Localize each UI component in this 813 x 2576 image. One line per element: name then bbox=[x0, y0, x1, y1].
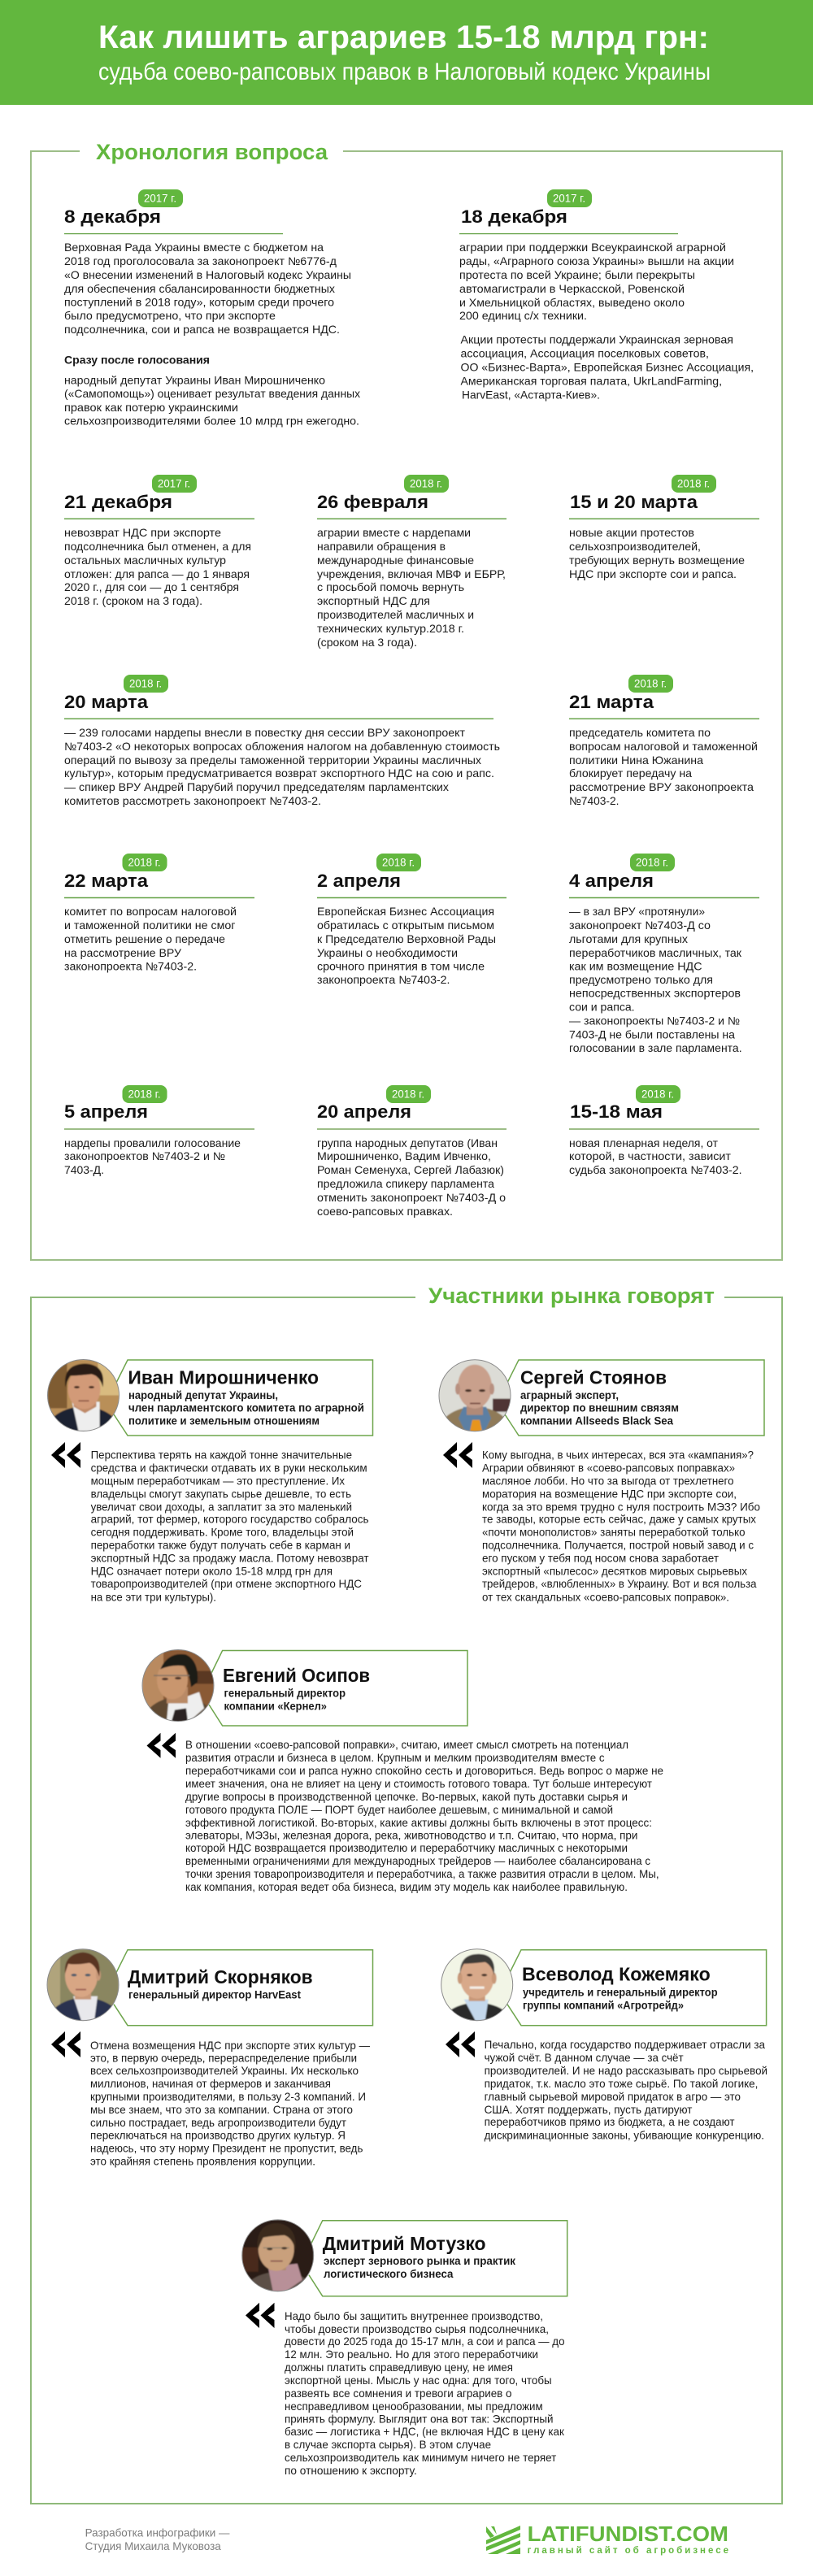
year badge: 2018 г. bbox=[128, 1088, 161, 1101]
event: 15 и 20 марта bbox=[569, 475, 759, 580]
body text bbox=[64, 527, 251, 607]
quote text: экспортной цены. Мысль у нас одна: для того, чтобы bbox=[285, 2374, 552, 2387]
body text: Американская торговая палата, UkrLandFarming, bbox=[460, 376, 722, 387]
event: 15-18 мая bbox=[569, 1085, 759, 1176]
portrait bbox=[47, 1948, 119, 2021]
body text: законопроектов №7403-2 и № bbox=[64, 1150, 225, 1162]
speaker: Всеволод Кожемяко bbox=[441, 1949, 767, 2141]
role bbox=[224, 1688, 346, 1712]
role: генеральный директор HarvEast bbox=[128, 1989, 301, 2001]
role: компании «Кернел» bbox=[224, 1700, 327, 1712]
body text: ОО «Бизнес-Варта», Европейская Бизнес Ассоциация, bbox=[460, 361, 754, 373]
quote text bbox=[285, 2310, 565, 2477]
body text: к Председателю Верховной Рады bbox=[317, 933, 496, 945]
name card bbox=[209, 1650, 467, 1726]
footer credit bbox=[85, 2527, 230, 2552]
body text: Украины о необходимости bbox=[317, 947, 458, 959]
body text: рассмотрение ВРУ законопроекта bbox=[569, 781, 754, 793]
body text: комитет по вопросам налоговой bbox=[64, 906, 237, 918]
body text: сельхозпроизводителей, bbox=[569, 541, 701, 553]
body text: блокирует передачу на bbox=[569, 767, 692, 780]
body text: международные финансовые bbox=[317, 554, 474, 567]
event: 21 декабря bbox=[64, 475, 254, 607]
date: 4 апреля bbox=[569, 871, 654, 891]
body text: 7403-Д. bbox=[64, 1164, 104, 1176]
body text: НДС при экспорте сои и рапса. bbox=[569, 568, 737, 580]
quote text: другие вопросы в производственной цепочке. Во-первых, какой путь доставки сырья и bbox=[185, 1791, 628, 1803]
body text: политики Нина Южанина bbox=[569, 754, 703, 767]
quote text: надеюсь, что эту норму Президент не пропустит, ведь bbox=[90, 2143, 363, 2155]
year badge bbox=[376, 854, 421, 871]
panel: chronology bbox=[31, 140, 782, 1260]
quote text bbox=[185, 1739, 663, 1893]
quote text: переработчиками сои и рапса нужно спокойно сесть и договориться. Ведь вопрос о марже не bbox=[185, 1765, 663, 1777]
icon: quote mark bbox=[443, 1442, 472, 1468]
event: 20 марта bbox=[64, 675, 500, 807]
logo: Latifundist bbox=[486, 2522, 728, 2556]
body text: отменить законопроект №7403-Д о bbox=[317, 1192, 506, 1204]
quote text bbox=[90, 2040, 370, 2167]
quote text: как компания, которая ведет оба бизнеса, видим эту модель как наиболее правильную. bbox=[185, 1881, 628, 1893]
date: 18 декабря bbox=[461, 206, 567, 227]
body text: голосовании в зале парламента. bbox=[569, 1042, 742, 1054]
quote text: трейдеров, «влюбленных» в Украину. Вот и вся польза bbox=[482, 1578, 757, 1590]
role bbox=[128, 1389, 364, 1427]
quote text: НДС означает потери около 15-18 млрд грн для bbox=[91, 1565, 333, 1577]
icon: striped field bbox=[486, 2526, 520, 2554]
quote text: развеять все сомнения и тревоги аграриев о bbox=[285, 2387, 512, 2400]
year badge: 2018 г. bbox=[410, 478, 442, 490]
quote text: Кому выгодна, в чьих интересах, вся эта «кампания»? bbox=[482, 1449, 754, 1461]
year badge: 2018 г. bbox=[382, 857, 415, 869]
quote text: его пуском у тебя под носом снова заработает bbox=[482, 1552, 719, 1564]
quote text: Отмена возмещения НДС при экспорте этих культур — bbox=[90, 2040, 370, 2052]
quote text: чужой счёт. В данном случае — за счёт bbox=[485, 2052, 684, 2064]
date: 20 апреля bbox=[317, 1101, 411, 1122]
portrait bbox=[141, 1649, 215, 1722]
year badge bbox=[122, 854, 167, 871]
body text: 2018 год проголосовала за законопроект №6776-д bbox=[64, 255, 337, 267]
quote text: аграрий, тот фермер, которого государство собралось bbox=[91, 1514, 369, 1526]
quote text: развития отрасли и бизнеса в целом. Крупным и мелким производителям вместе с bbox=[185, 1752, 605, 1764]
year badge bbox=[124, 675, 168, 693]
body text: — спикер ВРУ Андрей Парубий поручил председателям парламентских bbox=[64, 781, 449, 793]
role: учредитель и генеральный директор bbox=[523, 1987, 718, 1999]
date: 8 декабря bbox=[64, 206, 161, 227]
body text bbox=[569, 1137, 742, 1176]
tagline: главный сайт об агробизнесе bbox=[528, 2546, 728, 2556]
body text: невозврат НДС при экспорте bbox=[64, 527, 221, 539]
quote text: элеваторы, МЭЗы, железная дорога, река, животноводство и т.п. Считаю, что норма, при bbox=[185, 1829, 637, 1842]
quote text: временными ограничениями для международных трейдеров — наиболее сбалансирована с bbox=[185, 1855, 650, 1867]
body text: соево-рапсовых правках. bbox=[317, 1205, 453, 1218]
role: эксперт зернового рынка и практик bbox=[324, 2255, 515, 2267]
date: 22 марта bbox=[64, 871, 149, 891]
year badge bbox=[628, 675, 673, 693]
quote text: мощным переработчикам — это преступление. Их bbox=[91, 1475, 345, 1487]
name card bbox=[505, 1360, 764, 1436]
body text bbox=[569, 727, 758, 807]
quote text: Перспектива терять на каждой тонне значительные bbox=[91, 1449, 352, 1461]
body text: отметить решение о передаче bbox=[64, 933, 225, 945]
quote text: увеличат свои доходы, а заплатит за это маленький bbox=[91, 1501, 352, 1513]
body text bbox=[317, 527, 506, 649]
quote text: точки зрения товаропроизводителя и переработчика, а также развития отрасли в целом. Мы, bbox=[185, 1868, 659, 1880]
quote text: Надо было бы защитить внутреннее производство, bbox=[285, 2310, 543, 2322]
quote text: это, в первую очередь, перераспределение прибыли bbox=[90, 2053, 357, 2065]
body text: и таможенной политики не смог bbox=[64, 919, 236, 932]
name: Всеволод Кожемяко bbox=[522, 1964, 711, 1985]
panel: market participants bbox=[31, 1284, 782, 2504]
date: 21 марта bbox=[569, 692, 654, 712]
date: 20 марта bbox=[64, 692, 149, 712]
year badge bbox=[636, 1085, 680, 1103]
icon: quote mark bbox=[146, 1733, 176, 1758]
event: 22 марта bbox=[64, 854, 254, 973]
footer credit: Разработка инфографики — bbox=[85, 2527, 230, 2539]
header banner bbox=[0, 0, 813, 105]
body text: 200 единиц с/х техники. bbox=[459, 310, 587, 322]
body text bbox=[64, 906, 237, 973]
role: генеральный директор bbox=[224, 1688, 346, 1700]
quote text: это крайняя степень проявления коррупции. bbox=[90, 2155, 315, 2167]
body text: с просьбой помочь вернуть bbox=[317, 581, 464, 593]
quote text: на все эти три культуры). bbox=[91, 1591, 216, 1603]
quote text: экспортный «пылесос» десятков мировых сырьевых bbox=[482, 1565, 747, 1577]
body text: учреждения, включая МВФ и ЕБРР, bbox=[317, 568, 506, 580]
quote text: США. Хотят поддержать, пусть датируют bbox=[485, 2104, 692, 2116]
quote text: сильно пострадает, ведь агропроизводители будут bbox=[90, 2117, 346, 2129]
body text: для обеспечения сбалансированности бюджетных bbox=[64, 283, 335, 295]
body text: №7403-2 «О некоторых вопросах обложения налогом на добавленную стоимость bbox=[64, 741, 500, 753]
year badge: 2018 г. bbox=[636, 857, 668, 869]
body text: переработчиков масличных, так bbox=[569, 947, 742, 959]
date: 26 февраля bbox=[317, 492, 428, 512]
body text: — в зал ВРУ «протянули» bbox=[569, 906, 705, 918]
subheading: Сразу после голосования bbox=[64, 354, 210, 366]
event: 2 апреля bbox=[317, 854, 506, 986]
year badge: 2017 г. bbox=[144, 193, 176, 205]
name card bbox=[114, 1360, 372, 1436]
body text: 2018 г. (сроком на 3 года). bbox=[64, 595, 202, 607]
quote text: от тех скандальных «соево-рапсовых поправок». bbox=[482, 1591, 729, 1603]
event: 4 апреля bbox=[569, 854, 759, 1054]
body text: («Самопомощь») оценивает результат введения данных bbox=[64, 388, 360, 400]
quote text: сельхозпроизводитель как минимум ничего не теряет bbox=[285, 2452, 556, 2464]
body text: поступлений в 2018 году», которым среди прочего bbox=[64, 296, 334, 309]
role bbox=[324, 2255, 515, 2280]
role bbox=[523, 1987, 718, 2012]
body text bbox=[459, 241, 734, 322]
body text: группа народных депутатов (Иван bbox=[317, 1137, 498, 1149]
quote text: дискриминационные законы, убивающие конкуренцию. bbox=[485, 2129, 764, 2141]
body text: HarvEast, «Астарта-Киев». bbox=[462, 389, 600, 402]
body text: Европейская Бизнес Ассоциация bbox=[317, 906, 494, 918]
year badge bbox=[386, 1085, 431, 1103]
body text: предложила спикеру парламента bbox=[317, 1178, 494, 1190]
body text: культур», которым предусматривается возврат экспортного НДС на сою и рапс. bbox=[64, 767, 494, 780]
body text: сои и рапса. bbox=[569, 1001, 635, 1013]
quote text: производителей. И не надо рассказывать про сырьевой bbox=[485, 2065, 767, 2077]
body text: комитетов рассмотреть законопроект №7403-2. bbox=[64, 795, 321, 807]
body text: Верховная Рада Украины вместе с бюджетом на bbox=[64, 241, 324, 254]
speaker: Дмитрий Скорняков bbox=[47, 1949, 372, 2167]
body text: нардепы провалили голосование bbox=[64, 1137, 241, 1149]
quote text: средства и фактически отдавать их в руки нескольким bbox=[91, 1462, 367, 1474]
heading: market participants: Участники рынка говорят bbox=[428, 1284, 715, 1308]
year badge: 2017 г. bbox=[553, 193, 585, 205]
portrait bbox=[241, 2219, 314, 2292]
quote text: крупными производителями, в пользу 2-3 компаний. И bbox=[90, 2091, 366, 2103]
quote text: переключаться на производство других культур. Я bbox=[90, 2129, 346, 2141]
role: компании Allseeds Black Sea bbox=[520, 1415, 673, 1427]
name: Иван Мирошниченко bbox=[128, 1367, 319, 1388]
year badge bbox=[122, 1085, 167, 1103]
body text: председатель комитета по bbox=[569, 727, 711, 739]
name card bbox=[114, 1950, 372, 2026]
quote text: «почти монополистов» заняты переработкой только bbox=[482, 1527, 745, 1538]
quote text: В отношении «соево-рапсовой поправки», считаю, имеет смысл смотреть на потенциал bbox=[185, 1739, 628, 1751]
name card bbox=[507, 1950, 767, 2026]
body text: правок как потерю украинскими bbox=[64, 402, 238, 414]
event: 8 декабря bbox=[64, 189, 360, 428]
portrait bbox=[441, 1948, 514, 2021]
name: Дмитрий Мотузко bbox=[323, 2233, 486, 2254]
body text: Мирошниченко, Вадим Ивченко, bbox=[317, 1150, 491, 1162]
quote text: сегодня поддерживать. Кроме того, владельцы этой bbox=[91, 1527, 354, 1538]
quote text: имеет значения, она не влияет на цену и стоимость готового товара. Тут больше интересуют bbox=[185, 1778, 652, 1790]
body text: срочного принятия в том числе bbox=[317, 961, 485, 973]
body text: направили обращения в bbox=[317, 541, 446, 553]
body text: судьба законопроекта №7403-2. bbox=[569, 1164, 742, 1176]
event: 21 марта bbox=[569, 675, 759, 807]
body text bbox=[317, 906, 496, 986]
role: аграрный эксперт, bbox=[520, 1389, 619, 1401]
body text: 2020 г., для сои — до 1 сентября bbox=[64, 581, 239, 593]
body text: — законопроекты №7403-2 и № bbox=[569, 1014, 740, 1027]
body text bbox=[64, 1137, 241, 1176]
body text: сельхозпроизводителями более 10 млрд грн ежегодно. bbox=[64, 415, 359, 428]
body text: льготами для крупных bbox=[569, 933, 688, 945]
event: 5 апреля bbox=[64, 1085, 254, 1176]
date: 21 декабря bbox=[64, 492, 172, 512]
body text: законопроект №7403-Д со bbox=[569, 919, 711, 932]
body text: законопроекта №7403-2. bbox=[64, 961, 197, 973]
body text: предусмотрено только для bbox=[569, 974, 713, 986]
quote text: довести до 2025 года до 15-17 млн, а сои и рапса — до bbox=[285, 2335, 564, 2348]
role bbox=[520, 1389, 679, 1427]
year badge bbox=[404, 475, 449, 493]
date: 5 апреля bbox=[64, 1101, 148, 1122]
footer credit: Студия Михаила Муковоза bbox=[85, 2540, 221, 2552]
quote text: всех сельхозпроизводителей Украины. Их несколько bbox=[90, 2065, 359, 2077]
body text: остальных масличных культур bbox=[64, 554, 226, 567]
body text: как им возмещение НДС bbox=[569, 961, 702, 973]
quote text: чтобы довести производство сырья подсолнечника, bbox=[285, 2323, 549, 2335]
speaker: Сергей Стоянов bbox=[437, 1360, 764, 1603]
body text: (сроком на 3 года). bbox=[317, 636, 417, 649]
quote text: готового продукта ПОЛЕ — ПОРТ будет наиболее дешевым, с минимальной и самой bbox=[185, 1804, 613, 1816]
role: политике и земельным отношениям bbox=[128, 1415, 320, 1427]
body text: рады, «Аграрного союза Украины» вышли на акции bbox=[459, 255, 734, 267]
body text bbox=[64, 241, 351, 336]
body text: которой, в частности, зависит bbox=[569, 1150, 731, 1162]
year badge: 2018 г. bbox=[129, 678, 162, 690]
title: Как лишить аграриев 15-18 млрд грн: bbox=[98, 20, 709, 55]
name: Евгений Осипов bbox=[223, 1665, 370, 1686]
quote text: Аграрии обвиняют в «соево-рапсовых поправках» bbox=[482, 1462, 735, 1474]
quote text: Печально, когда государство поддерживает отрасли за bbox=[485, 2039, 765, 2051]
body text: технических культур.2018 г. bbox=[317, 623, 464, 635]
body text: обратилась с открытым письмом bbox=[317, 919, 494, 932]
body text: экспортный НДС для bbox=[317, 595, 430, 607]
name: Сергей Стоянов bbox=[520, 1367, 667, 1388]
year badge bbox=[630, 854, 675, 871]
year badge: 2018 г. bbox=[634, 678, 667, 690]
body text bbox=[460, 333, 754, 402]
name: Дмитрий Скорняков bbox=[128, 1966, 313, 1987]
body text: аграрии вместе с нардепами bbox=[317, 527, 471, 539]
body text: и Хмельницкой областях, выведено около bbox=[459, 297, 685, 309]
speaker: Иван Мирошниченко bbox=[46, 1359, 372, 1603]
body text: операций по вывозу за пределы таможенной территории Украины масличных bbox=[64, 754, 481, 767]
year badge: 2018 г. bbox=[677, 478, 710, 490]
body text: отложен: для рапса — до 1 января bbox=[64, 568, 250, 580]
role: член парламентского комитета по аграрной bbox=[128, 1402, 364, 1414]
body text: №7403-2. bbox=[569, 795, 620, 807]
quote text: принять формулу. Выглядит она вот так: Экспортный bbox=[285, 2413, 553, 2425]
body text: аграрии при поддержки Всеукраинской аграрной bbox=[459, 241, 726, 254]
quote text: в случае экспорта сырья). В этом случае bbox=[285, 2439, 491, 2451]
role: директор по внешним связям bbox=[520, 1402, 679, 1414]
body text bbox=[64, 374, 360, 428]
quote text: должны платить справедливую цену, не имея bbox=[285, 2361, 513, 2374]
quote text: владельцы смогут закупать сырье дешевле, то есть bbox=[91, 1488, 351, 1500]
subtitle: судьба соево-рапсовых правок в Налоговый кодекс Украины bbox=[98, 59, 711, 85]
quote text bbox=[91, 1449, 369, 1603]
quote text: моратория на возмещение НДС при экспорте сои, bbox=[482, 1488, 737, 1500]
body text: Акции протесты поддержали Украинская зерновая bbox=[460, 333, 733, 346]
body text: подсолнечника был отменен, а для bbox=[64, 541, 251, 553]
year badge bbox=[547, 189, 592, 207]
body text: подсолнечника, сои и рапса не возвращается НДС. bbox=[64, 324, 340, 336]
body text: новая пленарная неделя, от bbox=[569, 1137, 718, 1149]
quote text: экспортный НДС за продажу масла. Потому невозврат bbox=[91, 1552, 369, 1564]
year badge: 2018 г. bbox=[392, 1088, 424, 1101]
quote text: товаропроизводителей (при отмене экспортного НДС bbox=[91, 1578, 362, 1590]
icon: quote mark bbox=[51, 2031, 80, 2057]
quote text: переработки также будут получать себе в карман и bbox=[91, 1539, 350, 1551]
quote text bbox=[485, 2039, 767, 2141]
icon: quote mark bbox=[446, 2031, 475, 2057]
quote text: миллионов, начиная от фермеров и заканчивая bbox=[90, 2078, 331, 2090]
year badge: 2018 г. bbox=[641, 1088, 674, 1101]
role: народный депутат Украины, bbox=[128, 1389, 278, 1401]
body text bbox=[317, 1137, 506, 1218]
quote text: подсолнечника. Получается, построй новый завод и с bbox=[482, 1539, 754, 1551]
body text: законопроекта №7403-2. bbox=[317, 974, 450, 986]
quote text: которой НДС возвращается производителю и переработчику масличных с некоторыми bbox=[185, 1842, 628, 1854]
event: 18 декабря bbox=[459, 189, 754, 402]
year badge bbox=[152, 475, 197, 493]
quote text: несправедливом ценообразовании, мы предложим bbox=[285, 2400, 543, 2413]
quote text: эффективной логистикой. Во-вторых, какие активы должны быть включены в этот процесс: bbox=[185, 1817, 652, 1829]
body text: Роман Семенуха, Сергей Лабазюк) bbox=[317, 1164, 504, 1176]
speaker: Дмитрий Мотузко bbox=[242, 2220, 567, 2477]
quote text: придаток, т.к. масло это тоже сырьё. По такой логике, bbox=[485, 2078, 758, 2090]
quote text: главный сырьевой мировой придаток в агро — это bbox=[485, 2091, 741, 2103]
wordmark: LATIFUNDIST.COM bbox=[528, 2522, 728, 2546]
quote text: 12 млн. Это реально. Но для этого переработчики bbox=[285, 2348, 538, 2361]
quote text: мы все знаем, что это за компании. Страна от этого bbox=[90, 2104, 353, 2116]
role: логистического бизнеса bbox=[324, 2268, 454, 2280]
name card bbox=[309, 2221, 567, 2296]
quote text: те заводы, которые есть сейчас, даже у самых крутых bbox=[482, 1514, 756, 1526]
body text: на рассмотрение ВРУ bbox=[64, 947, 181, 959]
body text: «О внесении изменений в Налоговый кодекс Украины bbox=[64, 269, 351, 281]
quote text bbox=[482, 1449, 760, 1603]
body text bbox=[569, 527, 745, 580]
body text: автомагистрали в Черкасской, Ровенской bbox=[459, 283, 685, 295]
icon: quote mark bbox=[51, 1442, 80, 1468]
portrait bbox=[439, 1359, 511, 1432]
date: 2 апреля bbox=[317, 871, 401, 891]
heading: chronology: Хронология вопроса bbox=[96, 140, 328, 164]
body text: требующих вернуть возмещение bbox=[569, 554, 745, 567]
body text: ассоциация, Ассоциация поселковых советов, bbox=[460, 348, 709, 360]
body text: народный депутат Украины Иван Мирошниченко bbox=[64, 374, 325, 387]
body text: вопросам налоговой и таможенной bbox=[569, 741, 758, 753]
event: 26 февраля bbox=[317, 475, 506, 649]
body text: было предусмотрено, что при экспорте bbox=[64, 310, 276, 322]
year badge bbox=[672, 475, 716, 493]
quote text: масляное лобби. Но что за выгода от трехлетнего bbox=[482, 1475, 733, 1487]
body text: 7403-Д не были поставлены на bbox=[569, 1029, 735, 1041]
body text bbox=[64, 727, 500, 807]
body text: непосредственных экспортеров bbox=[569, 988, 741, 1000]
icon: quote mark bbox=[246, 2303, 275, 2328]
body text: протеста по всей Украине; были перекрыты bbox=[459, 269, 695, 281]
quote text: когда за это время трудно с нуля построить МЭЗ? Ибо bbox=[482, 1501, 760, 1513]
portrait bbox=[47, 1359, 120, 1431]
quote text: переработчиков прямо из бюджета, а не создают bbox=[485, 2116, 735, 2128]
body text: новые акции протестов bbox=[569, 527, 694, 539]
quote text: по отношению к экспорту. bbox=[285, 2465, 417, 2477]
year badge: 2018 г. bbox=[128, 857, 161, 869]
speaker: Евгений Осипов bbox=[142, 1650, 663, 1893]
date: 15 и 20 марта bbox=[570, 492, 698, 512]
year badge bbox=[138, 189, 183, 207]
event: 20 апреля bbox=[317, 1085, 506, 1218]
body text: — 239 голосами нардепы внесли в повестку дня сессии ВРУ законопроект bbox=[64, 727, 465, 739]
body text bbox=[569, 906, 742, 1054]
date: 15-18 мая bbox=[570, 1101, 663, 1122]
quote text: базис — логистика + НДС, (не включая НДС в цену как bbox=[285, 2426, 565, 2438]
year badge: 2017 г. bbox=[158, 478, 190, 490]
body text: производителей масличных и bbox=[317, 609, 474, 621]
role: группы компаний «Агротрейд» bbox=[523, 2000, 684, 2012]
